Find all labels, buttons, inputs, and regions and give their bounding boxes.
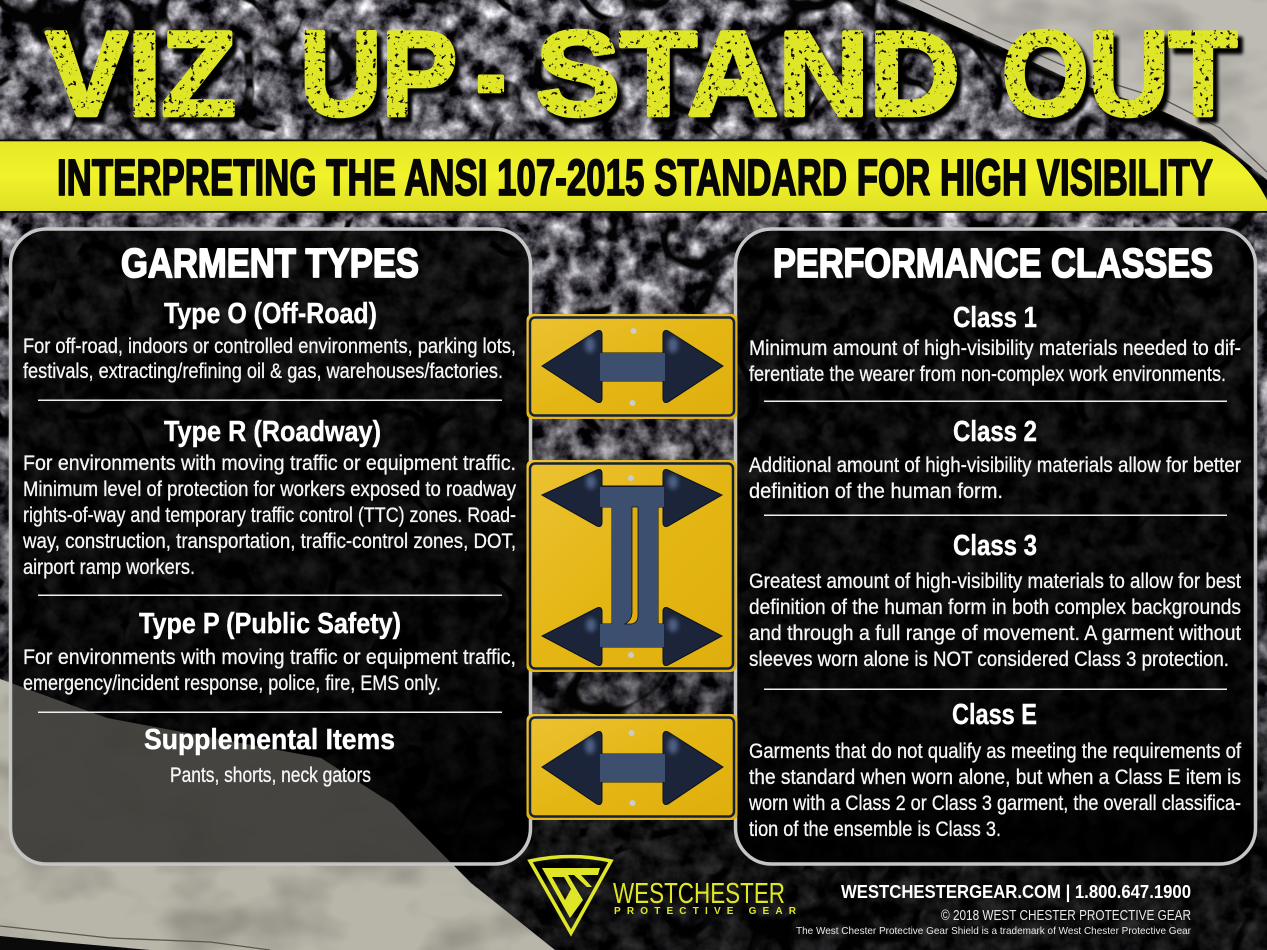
title (46, 7, 1237, 141)
trademark note: The West Chester Protective Gear Shield is a trademark of West Chester Protective Gear (796, 925, 1191, 937)
type R: rights-of-way and temporary traffic control (TTC) zones. Road- (23, 503, 516, 527)
cloth top right (890, 0, 1267, 200)
class E (748, 699, 1241, 841)
sign: horizontal double arrow top (526, 314, 738, 419)
title: VIZ (46, 7, 236, 141)
icon: shield (530, 856, 611, 933)
type R: Type R (Roadway) (164, 416, 381, 448)
type R (22, 416, 516, 579)
class 2: Class 2 (953, 416, 1037, 448)
tagline: PROTECTIVE GEAR (614, 906, 797, 917)
footer contact details: WESTCHESTERGEAR.COM | 1.800.647.1900 (841, 882, 1191, 902)
class 1 (749, 302, 1241, 386)
class E: tion of the ensemble is Class 3. (749, 817, 1001, 841)
supplemental items (144, 724, 395, 787)
sign: horizontal double arrow bottom (526, 714, 738, 820)
title: UP (300, 7, 457, 141)
title: STAND (536, 7, 960, 141)
type O: Type O (Off-Road) (164, 298, 377, 330)
copyright: © 2018 WEST CHESTER PROTECTIVE GEAR (941, 908, 1191, 924)
type R: airport ramp workers. (23, 555, 195, 579)
supplemental items: Supplemental Items (144, 724, 395, 756)
panel: garment types (8, 227, 532, 866)
class 3: Class 3 (953, 530, 1037, 562)
title: OUT (1002, 7, 1237, 141)
panel: performance classes (736, 229, 1256, 864)
class 3 (749, 530, 1241, 671)
title: - (476, 7, 506, 141)
footer contact details (796, 882, 1191, 937)
wordmark: WESTCHESTER (613, 878, 785, 910)
type R: Minimum level of protection for workers exposed to roadway (23, 477, 516, 501)
class 2 (749, 416, 1241, 503)
type P (23, 608, 516, 695)
class E: Class E (952, 699, 1037, 731)
type R: For environments with moving traffic or equipment traffic. (23, 451, 516, 475)
sign: double arrow with parallel stems (526, 460, 736, 672)
type R: way, construction, transportation, traffic-control zones, DOT, (22, 529, 516, 553)
class 2: definition of the human form. (749, 479, 1003, 503)
supplemental items: Pants, shorts, neck gators (170, 763, 371, 787)
yellow banner (0, 140, 1267, 213)
type P: For environments with moving traffic or equipment traffic, (23, 645, 516, 669)
type O: festivals, extracting/refining oil & gas, warehouses/factories. (23, 359, 503, 383)
logo: West Chester shield and wordmark (530, 856, 797, 933)
type O (23, 298, 516, 383)
type P: emergency/incident response, police, fire, EMS only. (23, 671, 441, 695)
cloth bottom left (0, 679, 555, 950)
heading: garment types: GARMENT TYPES (121, 240, 419, 286)
type O: For off-road, indoors or controlled environments, parking lots, (23, 334, 516, 358)
class 1: Class 1 (953, 302, 1037, 334)
type P: Type P (Public Safety) (139, 608, 401, 640)
